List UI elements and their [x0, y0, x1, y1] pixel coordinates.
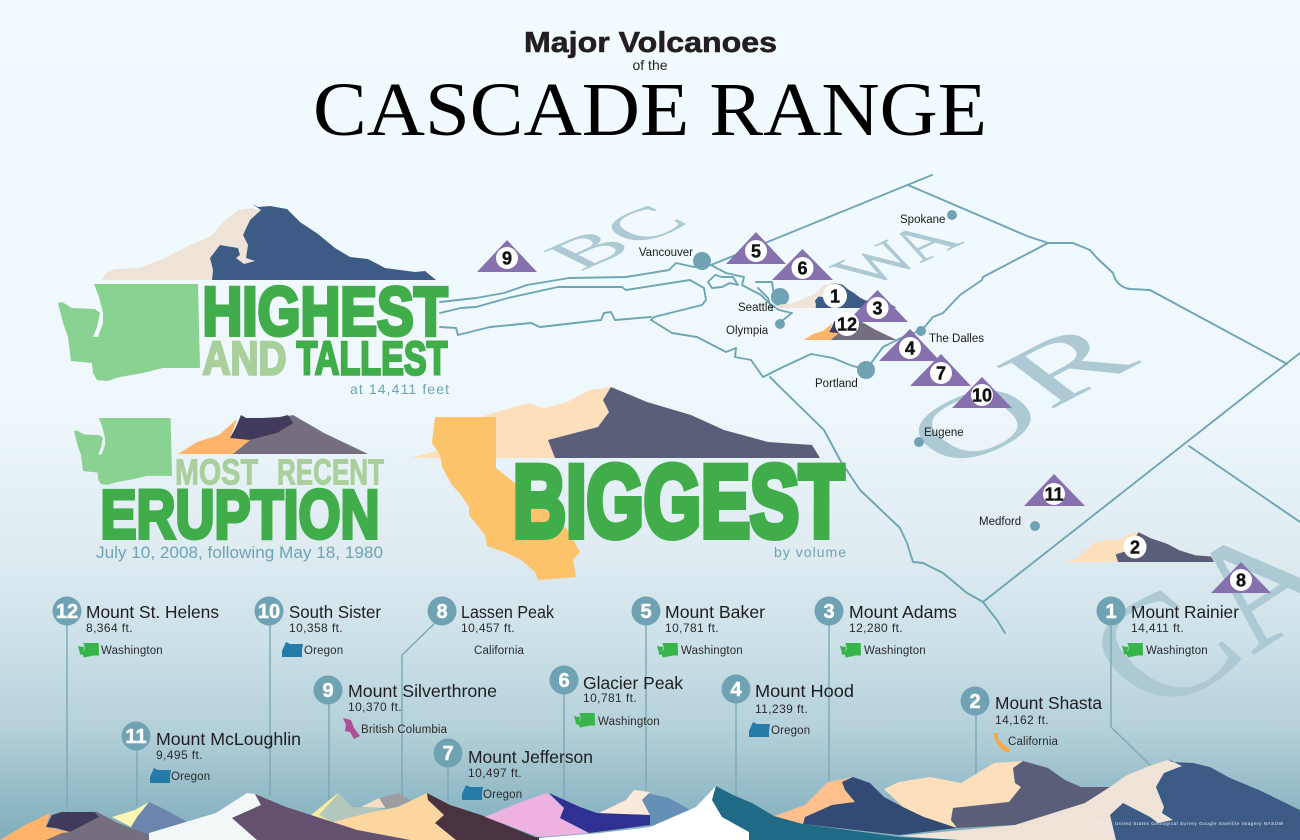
- marker 6: 6: [797, 258, 808, 278]
- headline: HIGHEST: HIGHEST: [202, 273, 448, 350]
- headline: MOST: MOST: [175, 452, 258, 492]
- city: The Dalles: [916, 326, 984, 345]
- marker 6: [772, 249, 833, 280]
- range: South Sister: [149, 793, 410, 840]
- marker 4: [879, 329, 940, 361]
- label: South Sister: [254, 596, 381, 657]
- title line: of the: of the: [632, 57, 668, 73]
- label: Mount Baker: [632, 596, 765, 657]
- label: Glacier Peak: Glacier Peak: [583, 673, 683, 693]
- state: Washington: [58, 284, 200, 381]
- label: Glacier Peak: [550, 666, 683, 728]
- range: Mount Silverthrone: [311, 793, 386, 822]
- label: Mount Silverthrone: Mount Silverthrone: [348, 681, 497, 701]
- caption: by volume: by volume: [774, 544, 846, 560]
- marker 8: [1211, 562, 1271, 593]
- state label: WA: WA: [814, 214, 979, 295]
- label: Mount St. Helens: 8,364 ft.: [86, 621, 133, 635]
- city markers: [639, 210, 1040, 531]
- city: Eugene: [914, 427, 964, 447]
- city: Medford: [979, 516, 1040, 531]
- marker 12 badge: 12: [837, 314, 857, 334]
- marker 4: 4: [905, 338, 915, 358]
- marker 3: [847, 290, 908, 322]
- range: Mount Baker: [597, 790, 700, 826]
- label: Mount Rainier: Mount Rainier: [1131, 602, 1239, 622]
- label: Mount Baker: 5: [640, 601, 652, 623]
- label: Mount Jefferson: 7: [442, 743, 454, 765]
- label: Mount Shasta: Mount Shasta: [995, 693, 1102, 713]
- marker 9: [477, 240, 537, 272]
- label: Mount Adams: 3: [823, 601, 835, 623]
- marker 1 with mountain: [776, 283, 896, 308]
- headline: ERUPTION: ERUPTION: [100, 476, 380, 553]
- label: South Sister: 10,358 ft.: [289, 621, 343, 635]
- range: Mount Jefferson dark: [427, 793, 560, 840]
- marker 5: 5: [751, 242, 761, 262]
- marker 7: [910, 354, 971, 386]
- city: Spokane: [900, 210, 957, 226]
- city: Vancouver: [639, 247, 711, 270]
- range: Mount Rainier: [899, 759, 1300, 840]
- marker 5: [726, 232, 786, 264]
- state: Washington small: [74, 418, 172, 485]
- label: Glacier Peak: 10,781 ft.: [583, 691, 637, 705]
- marker 10: 10: [972, 386, 992, 406]
- label: Lassen Peak: California: [474, 645, 525, 657]
- state: California: [432, 417, 580, 580]
- highest and tallest feature: [58, 204, 449, 397]
- label: South Sister: 10: [258, 601, 280, 623]
- label: Mount Silverthrone: 10,370 ft.: [348, 700, 402, 714]
- headline: AND: AND: [202, 332, 286, 384]
- label: Mount Shasta: [960, 686, 1102, 752]
- label: Mount Jefferson: Oregon: [483, 789, 522, 801]
- label: Mount Hood: Oregon: [771, 725, 810, 737]
- label: Lassen Peak: [428, 596, 554, 657]
- label: Mount St. Helens: Washington: [101, 645, 163, 657]
- range: Mount Hood: [539, 786, 961, 840]
- biggest feature: [411, 387, 846, 580]
- label: Mount Baker: Washington: [681, 645, 743, 657]
- range: Mount Adams: [774, 777, 957, 835]
- label: Mount Jefferson: [434, 738, 593, 801]
- label: Mount McLoughlin: [122, 722, 301, 783]
- label: Mount Baker: 10,781 ft.: [665, 621, 719, 635]
- label: Glacier Peak: 6: [558, 670, 570, 692]
- state label: OR: O: [876, 361, 1072, 486]
- caption: eruption date: July 10, 2008, following May 18, 1980: [96, 543, 383, 562]
- range: Glacier Peak: [485, 793, 650, 837]
- label: Mount Hood: 11,239 ft.: [755, 702, 808, 716]
- mountain: St. Helens: [178, 415, 368, 454]
- label: Mount Silverthrone: British Columbia: [361, 724, 448, 736]
- map outlines: [440, 175, 1300, 633]
- headline: BIGGEST: BIGGEST: [513, 444, 844, 558]
- headline: RECENT: RECENT: [277, 452, 384, 492]
- label: Mount Hood: [722, 674, 854, 737]
- label: Mount McLoughlin: 11: [125, 726, 147, 748]
- marker 8: 8: [1236, 570, 1246, 590]
- label: Mount St. Helens: [52, 596, 219, 657]
- label: Mount McLoughlin: Oregon: [171, 771, 210, 783]
- city: Olympia: Olympia: [726, 325, 769, 337]
- label: Mount Adams: Washington: [864, 645, 926, 657]
- sources: Sources: United States Geological Survey Google Satellite Imagery NASOW: [1091, 821, 1284, 826]
- marker 9: 9: [502, 248, 512, 268]
- mountain: Shasta: [411, 387, 820, 458]
- city: The Dalles: The Dalles: [929, 333, 984, 345]
- label: South Sister: Oregon: [304, 645, 343, 657]
- city: Olympia: [726, 319, 785, 337]
- label: Mount Adams: 12,280 ft.: [849, 621, 903, 635]
- label: South Sister: South Sister: [289, 602, 381, 622]
- label: Mount Silverthrone: [314, 676, 497, 739]
- marker 10: [952, 377, 1012, 408]
- marker 1 with mountain: 1: [830, 286, 840, 306]
- marker 11: 11: [1044, 484, 1064, 504]
- label: Mount Silverthrone: 9: [322, 680, 334, 702]
- state label: OR: R: [973, 304, 1161, 425]
- label: Mount St. Helens: 12: [56, 601, 78, 623]
- title: [313, 27, 987, 152]
- range: Mount Shasta: [884, 761, 1110, 828]
- title line: Cascade Range: CASCADE RANGE: [313, 68, 987, 152]
- label: Lassen Peak: 8: [436, 601, 448, 623]
- label: Lassen Peak: Lassen Peak: [461, 602, 554, 622]
- label: Lassen Peak: 10,457 ft.: [461, 621, 515, 635]
- caption: at 14,411 feet: at 14,411 feet: [350, 381, 449, 397]
- title line: Major Volcanoes: Major Volcanoes: [524, 27, 777, 59]
- marker 12 with mountain: [804, 321, 897, 340]
- label: Mount Shasta: 2: [969, 691, 981, 713]
- label: Mount Rainier: Washington: [1146, 645, 1208, 657]
- state label: BC: BC: [527, 196, 705, 279]
- marker 2 with mountain: 2: [1130, 538, 1140, 558]
- label: Mount McLoughlin: Mount McLoughlin: [156, 729, 301, 749]
- label: Mount Hood: 4: [730, 679, 742, 701]
- marker 7: 7: [936, 364, 946, 384]
- city: Medford: Medford: [979, 516, 1021, 528]
- marker 11: [1024, 474, 1085, 506]
- range: Mount Jefferson peach: [332, 793, 456, 840]
- range: Lassen Peak: [361, 793, 415, 809]
- city: Seattle: Seattle: [738, 302, 774, 314]
- city: Seattle: [738, 288, 789, 314]
- label: Mount Jefferson: Mount Jefferson: [468, 747, 593, 767]
- city: Vancouver: Vancouver: [639, 247, 693, 259]
- label: Mount McLoughlin: 9,495 ft.: [156, 748, 203, 762]
- label: Mount Rainier: 1: [1105, 601, 1117, 623]
- city: Portland: Portland: [815, 378, 858, 390]
- city: Spokane: Spokane: [900, 214, 945, 226]
- label: Mount Jefferson: 10,497 ft.: [468, 766, 522, 780]
- label: Mount Hood: Mount Hood: [755, 681, 854, 701]
- range: Mount McLoughlin: [112, 802, 200, 840]
- marker 3: 3: [872, 298, 883, 318]
- label: Mount Adams: Mount Adams: [849, 602, 957, 622]
- city: Portland: [815, 361, 875, 390]
- label: Mount Baker: Mount Baker: [665, 602, 765, 622]
- leader lines: [67, 620, 1151, 810]
- label: Glacier Peak: Washington: [598, 716, 660, 728]
- range: Mount St. Helens: [0, 811, 162, 840]
- headline: TALLEST: TALLEST: [296, 332, 448, 384]
- label: Mount Rainier: 14,411 ft.: [1131, 621, 1184, 635]
- marker 12 badge: [835, 312, 859, 336]
- label: Mount Adams: [814, 596, 957, 657]
- marker 2 with mountain: [1066, 532, 1214, 562]
- label: Mount Shasta: 14,162 ft.: [995, 713, 1049, 727]
- mountain: Rainier: [102, 204, 436, 280]
- most recent eruption feature: [74, 415, 384, 562]
- label: Mount Rainier: [1096, 596, 1239, 657]
- label: Mount Shasta: California: [1008, 736, 1059, 748]
- city: Eugene: Eugene: [924, 427, 964, 439]
- label: Mount St. Helens: Mount St. Helens: [86, 602, 219, 622]
- mountain range: [0, 759, 1300, 840]
- map markers: [477, 232, 1271, 593]
